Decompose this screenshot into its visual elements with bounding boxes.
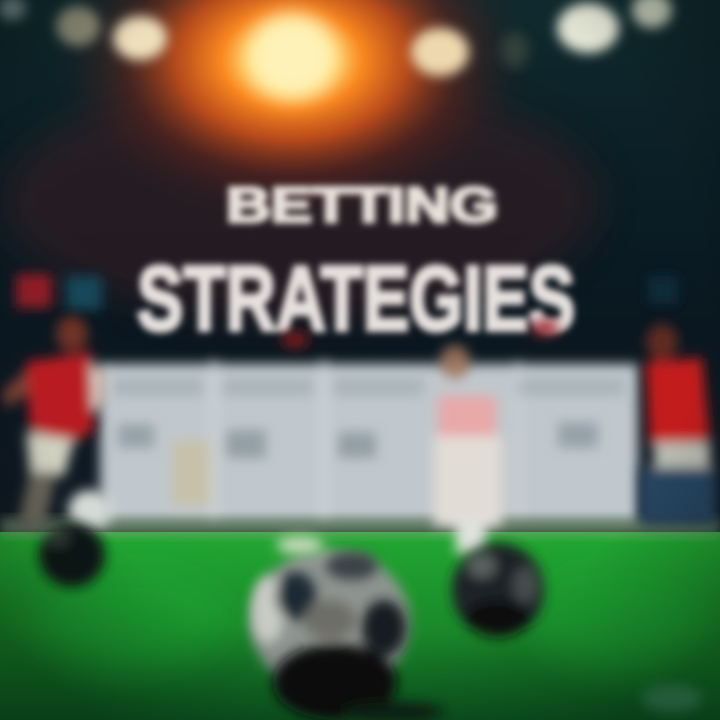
heading line 1: blurred small title: BETTING xyxy=(226,177,498,233)
coloured side markers xyxy=(16,274,678,348)
ball: medium right xyxy=(452,543,544,637)
background: dark stadium xyxy=(0,0,720,540)
ball: small left xyxy=(39,523,105,587)
ball: large centre xyxy=(250,536,444,720)
table cells xyxy=(112,360,625,520)
table panel xyxy=(100,360,638,522)
player: centre in white xyxy=(434,345,502,554)
player: left in red xyxy=(2,316,112,530)
reddish haze behind title xyxy=(0,80,600,320)
stadium sun glow xyxy=(52,0,532,225)
heading line 2: blurred large title: STRATEGIES xyxy=(137,248,575,350)
pitch xyxy=(0,518,720,720)
floodlights row xyxy=(0,0,672,76)
player: right in red xyxy=(640,324,716,524)
